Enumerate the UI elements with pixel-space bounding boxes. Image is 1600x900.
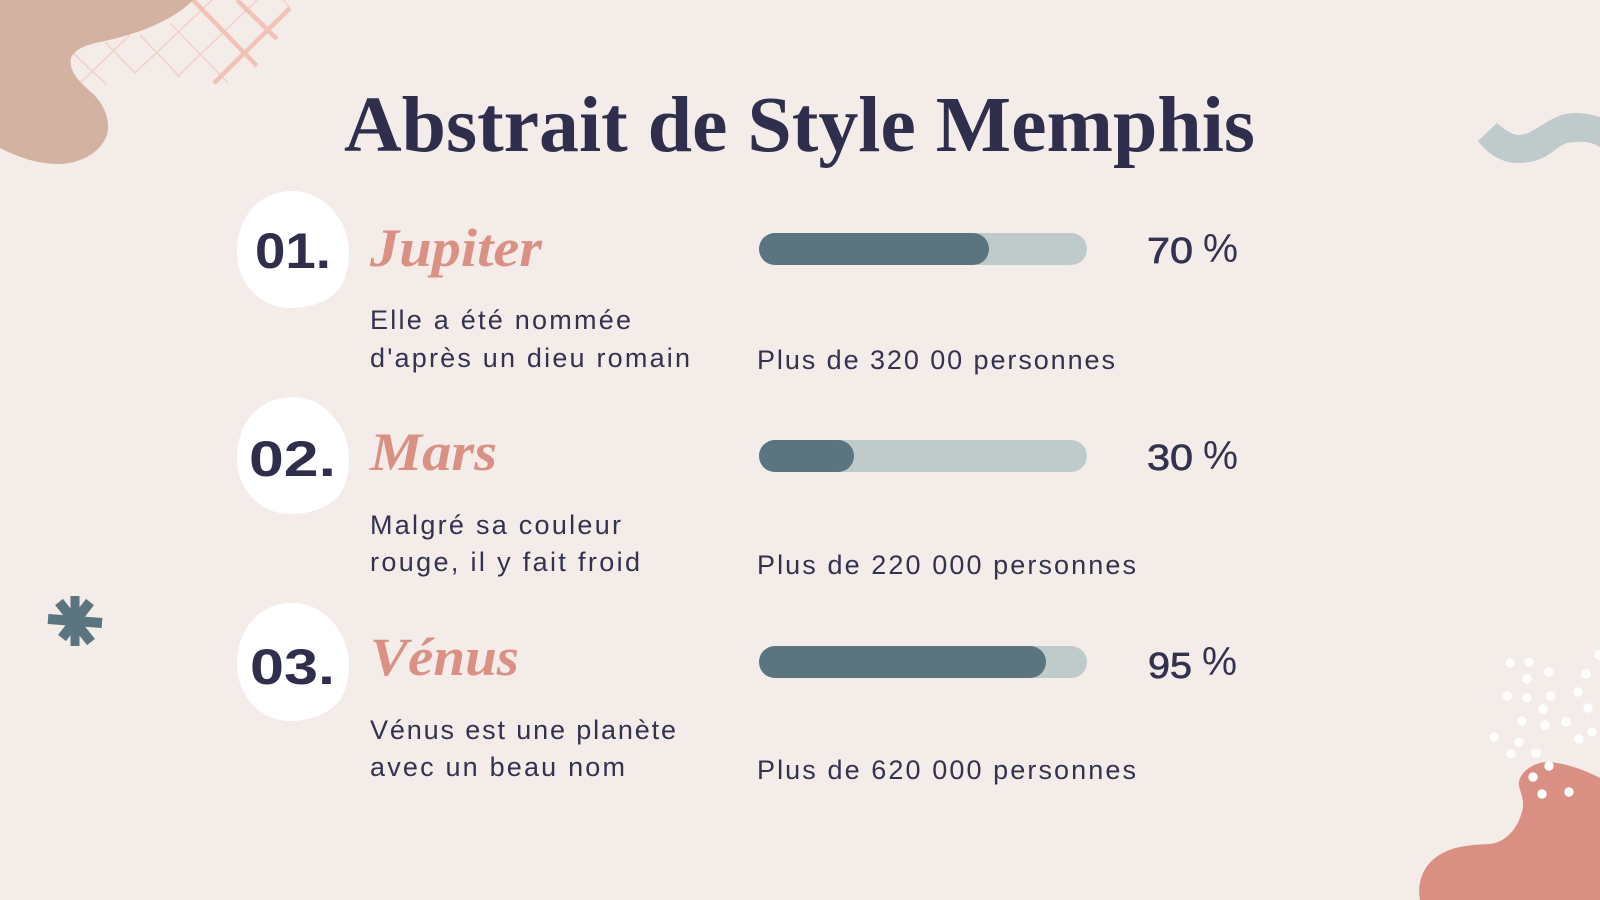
description: Vénus: avec un beau nom [370,752,625,782]
blob: top left tan [0,0,193,164]
row 2: Mars [237,397,1238,580]
value: 30 % [1147,434,1238,478]
number badge 01: 01. [255,223,331,279]
number badge 03 [237,603,349,721]
description: Mars: Malgré sa couleur [370,510,621,540]
description: Mars: rouge, il y fait froid [370,547,640,577]
heading: Jupiter: Jupiter [369,218,543,278]
caption: people count: Plus de 620 000 personnes [757,755,1136,785]
progress bar: 70% [759,233,1087,265]
dots: bottom right [1489,650,1600,799]
title: Abstrait de Style Memphis [344,82,1255,169]
row 3: Vénus [237,603,1237,785]
description: Vénus [370,715,676,782]
caption: people count: Plus de 220 000 personnes [757,550,1136,580]
caption: people count: Plus de 320 00 personnes [757,345,1115,375]
value: 70 % [1147,227,1238,271]
description: Jupiter: d'après un dieu romain [370,343,690,373]
value: 95 % [1148,640,1237,686]
number badge 02: 02. [249,431,336,487]
value: 30 %: 30 [1147,437,1193,478]
value: 95 %: % [1202,640,1237,684]
progress bar: 30% [759,440,1087,472]
heading: Mars: Mars [369,422,497,482]
progress bar: 95% [759,646,1087,678]
description: Mars [370,510,640,577]
number badge 03: 03. [250,639,335,695]
number badge 01 [237,191,349,308]
value: 70 %: % [1203,227,1238,271]
value: 30 %: % [1203,434,1238,478]
description: Jupiter: Elle a été nommée [370,305,631,335]
row 1: Jupiter [237,191,1238,375]
decorative grid: top left [73,0,290,85]
blob: bottom right coral [1419,762,1600,900]
heading: Vénus: Vénus [370,627,519,687]
value: 95 %: 95 [1148,645,1192,686]
icon: asterisk [48,596,102,646]
value: 70 %: 70 [1147,230,1193,271]
number badge 02 [237,397,349,514]
wave: top right [1478,113,1600,163]
description: Jupiter [370,305,690,373]
description: Vénus: Vénus est une planète [370,715,676,745]
